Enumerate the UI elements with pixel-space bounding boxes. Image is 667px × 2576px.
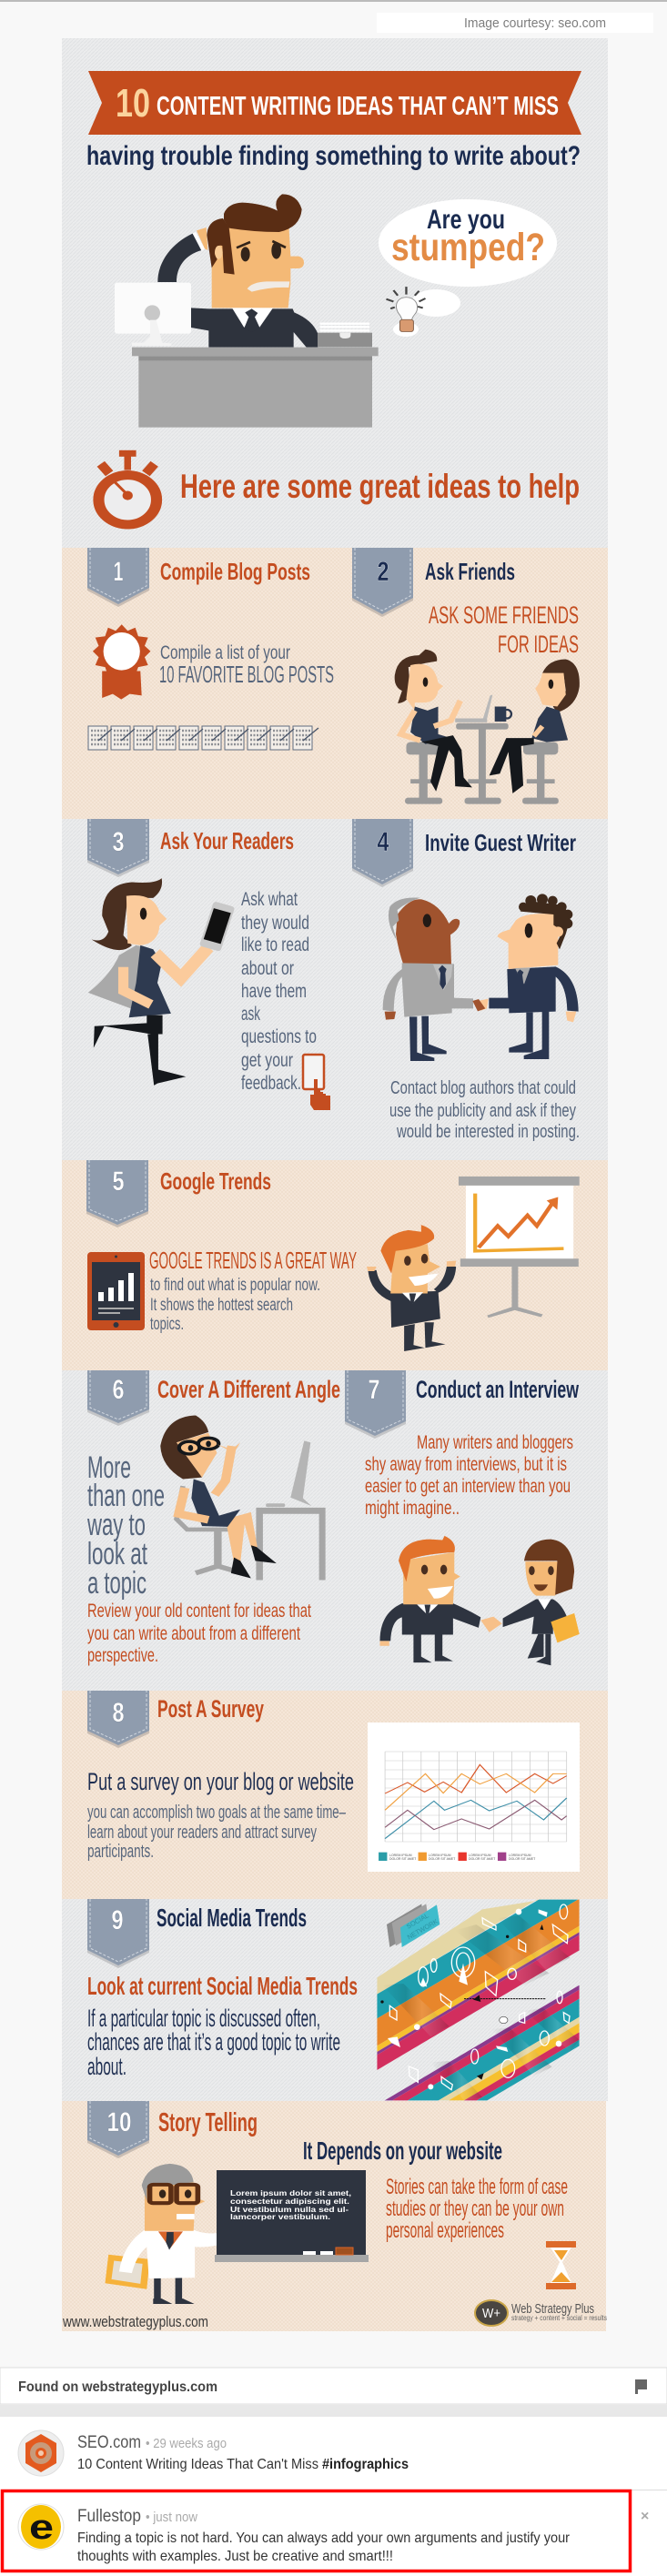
title ribbon (88, 71, 581, 135)
text: look at current trends (87, 1972, 358, 2080)
badge 4: 4 (377, 827, 389, 857)
text: look at current trends: chances are that it’s a good topic to write (87, 2028, 340, 2056)
text: look at current trends: If a particular topic is discussed often, (87, 2005, 320, 2032)
chart: survey line chart: LOREM IPSUM (509, 1854, 531, 1857)
text: look at current trends: Look at current Social Media Trends (87, 1972, 358, 2000)
text: put a survey on your blog: Put a survey on your blog or website (87, 1768, 354, 1795)
icon: flag (635, 2379, 647, 2394)
illustration: isometric social ribbons (377, 1900, 580, 2100)
text: ask what they would like: Ask what (241, 889, 298, 910)
badge 1: 1 (113, 557, 124, 587)
badge 1 (87, 548, 149, 607)
text: contact blog authors: use the publicity and ask if they (389, 1101, 576, 1121)
chalkboard with text: Ut vestibulum nulla sed ul- (230, 2205, 349, 2214)
badge 5 (86, 1160, 148, 1227)
text: google trends is a great way: It shows the hottest search (150, 1296, 293, 1315)
text: ask what they would like: about or (241, 958, 294, 979)
title ribbon: 10 (116, 81, 150, 126)
text: ask what they would like: like to read (241, 934, 309, 955)
logo: web strategy plus (475, 2300, 607, 2326)
text: google trends is a great way: topics. (150, 1315, 184, 1334)
speech bubble: are you stumped: stumped? (391, 226, 545, 269)
chalkboard with text: consectetur adipiscing elit. (230, 2197, 349, 2206)
badge 9 (87, 1899, 149, 1968)
text: ask what they would like (241, 889, 317, 1094)
badge 5: 5 (113, 1167, 124, 1197)
text: ask what they would like: they would (241, 913, 309, 934)
chart: presentation board with rising arrow (459, 1177, 580, 1318)
text: more than one way: than one (87, 1479, 165, 1513)
heading: cover a different angle: Cover A Different Angle (157, 1376, 340, 1403)
text: compile a list (159, 642, 334, 688)
text: more than one way: look at (87, 1537, 147, 1571)
icon: award ribbon (93, 624, 150, 700)
badge 3 (87, 819, 149, 877)
icon: tablet with bar chart (87, 1252, 145, 1330)
badge 4 (352, 819, 413, 887)
text: many writers and bloggers (365, 1432, 573, 1519)
chart: survey line chart (368, 1722, 580, 1872)
card: source (0, 2368, 667, 2404)
heading: ask friends: Ask Friends (425, 558, 515, 585)
panel: idea 8 post a survey (62, 1691, 608, 1899)
badge 2: 2 (377, 557, 389, 587)
comment: fullestop highlighted: Finding a topic is not hard. You can always add your own arguments and justify your (77, 2531, 571, 2546)
text: contact blog authors: Contact blog authors that could (390, 1078, 576, 1098)
heading: conduct an interview: Conduct an Interview (416, 1376, 580, 1403)
figure: woman holding phone (88, 878, 235, 1086)
figure: woman with glasses at desk (160, 1415, 326, 1580)
badge 2 (352, 548, 413, 617)
figure: excited man (367, 1225, 456, 1351)
text: google trends is a great way: GOOGLE TRENDS IS A GREAT WAY (149, 1247, 357, 1274)
subheading: it depends on your website: It Depends on your website (303, 2137, 502, 2165)
panel: ideas 6 and 7 (62, 1370, 608, 1691)
heading: story telling: Story Telling (158, 2108, 258, 2137)
figure: two women at a cafe table (395, 650, 580, 804)
text: contact blog authors (389, 1078, 580, 1142)
text: stories can take the form: personal experiences (386, 2218, 504, 2243)
badge 7: 7 (368, 1375, 380, 1405)
heading: invite guest writer: Invite Guest Writer (425, 829, 576, 856)
illustration: isometric social ribbons: NETWORK (406, 1917, 440, 1941)
logo: web strategy plus: W+ (482, 2306, 500, 2321)
icon: light bulb (386, 287, 426, 331)
chart: survey line chart: DOLOR SIT AMET (389, 1857, 417, 1861)
callout: ask some friends: FOR IDEAS (498, 631, 579, 658)
card: comments (0, 2417, 667, 2576)
image courtesy caption (377, 13, 653, 33)
text: compile a list: 10 FAVORITE BLOG POSTS (159, 661, 334, 688)
heading: compile blog posts: Compile Blog Posts (160, 558, 310, 585)
badge 8 (87, 1691, 149, 1748)
panel: hero intro (62, 38, 608, 548)
logo: web strategy plus: Web Strategy Plus (511, 2301, 594, 2317)
text: review your old content: you can write about from a different (87, 1623, 300, 1644)
figure: man and woman shaking hands (379, 1536, 580, 1665)
comment: seo.com: • 29 weeks ago (146, 2436, 227, 2451)
chart: survey line chart: DOLOR SIT AMET (469, 1857, 496, 1861)
image courtesy caption: Image courtesy: seo.com (464, 15, 606, 31)
badge 9: 9 (111, 1905, 124, 1935)
speech bubble: are you stumped: Are you (427, 205, 505, 235)
panel: ideas 3 and 4 (62, 819, 608, 1160)
badge 10: 10 (107, 2107, 131, 2137)
text: many writers and bloggers: might imagine.. (365, 1498, 460, 1519)
text: more than one way: More (87, 1450, 131, 1485)
figure: teacher (105, 2164, 245, 2304)
figure: two men shaking hands (383, 894, 579, 1061)
logo: web strategy plus: strategy + content + social = results (511, 2314, 607, 2322)
comment: fullestop highlighted: thoughts with examples. Just be creative and smart!!! (77, 2549, 393, 2564)
comment: fullestop highlighted: Fullestop (77, 2507, 141, 2526)
icon: phone and pointing hand (303, 1055, 330, 1110)
text: ask what they would like: questions to (241, 1026, 317, 1047)
heading: post a survey: Post A Survey (157, 1695, 264, 1722)
text: look at current trends: about. (87, 2053, 126, 2080)
text: google trends is a great way: to find out what is popular now. (150, 1276, 320, 1295)
chart: survey line chart: LOREM IPSUM (429, 1854, 451, 1857)
text: put a survey on your blog: participants. (87, 1842, 154, 1862)
text: compile a list: Compile a list of your (160, 642, 290, 663)
comment: seo.com: SEO.com (77, 2433, 141, 2452)
text: contact blog authors: would be interested in posting. (396, 1122, 580, 1142)
text: put a survey on your blog: learn about your readers and attract survey (87, 1823, 317, 1843)
icon row: ten checklists (88, 726, 318, 750)
text: stories can take the form (386, 2175, 568, 2243)
heading: social media trends: Social Media Trends (157, 1904, 307, 1932)
text: ask what they would like: have them (241, 981, 307, 1002)
text: many writers and bloggers: easier to get an interview than you (365, 1476, 571, 1497)
text: ask what they would like: ask (241, 1004, 260, 1025)
text: many writers and bloggers: Many writers and bloggers (417, 1432, 573, 1453)
comment: fullestop highlighted: e (29, 2509, 54, 2547)
panel: ideas 1 and 2 (62, 548, 608, 819)
callout: ask some friends: ASK SOME FRIENDS (429, 601, 579, 629)
callout: ask some friends (429, 601, 579, 658)
icon: stopwatch (97, 450, 158, 524)
text: google trends is a great way (149, 1247, 357, 1334)
speech bubble: are you stumped (379, 199, 557, 337)
badge 7 (345, 1370, 406, 1439)
comment: seo.com: 10 Content Writing Ideas That Can't Miss (77, 2457, 318, 2472)
text: ask what they would like: feedback. (241, 1073, 301, 1094)
panel: idea 9 social media trends (62, 1899, 608, 2101)
heading: ask your readers: Ask Your Readers (160, 827, 294, 854)
chalkboard with text: lamcorper vestibulum. (230, 2212, 330, 2221)
badge 6 (87, 1370, 149, 1426)
badge 3: 3 (113, 827, 124, 857)
chart: survey line chart: DOLOR SIT AMET (429, 1857, 456, 1861)
text: review your old content: Review your old content for ideas that (87, 1601, 311, 1621)
text: more than one way: a topic (87, 1566, 147, 1601)
text: put a survey on your blog (87, 1768, 354, 1862)
comment: fullestop highlighted: • just now (146, 2510, 197, 2525)
text: put a survey on your blog: you can accomplish two goals at the same time– (87, 1803, 347, 1823)
chalkboard with text: Lorem ipsum dolor sit amet, (230, 2188, 351, 2197)
chart: survey line chart: LOREM IPSUM (389, 1854, 412, 1857)
badge 8: 8 (113, 1698, 124, 1728)
comment: seo.com: #infographics (322, 2457, 409, 2472)
panel: idea 10 story telling (62, 2101, 607, 2331)
text: more than one way: way to (86, 1508, 146, 1542)
comment: fullestop highlighted (2, 2491, 630, 2571)
illustration: isometric social ribbons: SOCIAL (405, 1911, 430, 1931)
text: review your old content (87, 1601, 311, 1666)
panel: idea 5 google trends (62, 1160, 608, 1370)
comment: seo.com (18, 2430, 409, 2476)
chalkboard with text (215, 2170, 369, 2262)
badge 10 (87, 2101, 149, 2158)
chart: survey line chart: LOREM IPSUM (469, 1854, 491, 1857)
figure: stumped man at desk (115, 194, 379, 428)
heading: google trends: Google Trends (160, 1167, 271, 1195)
card: source: Found on webstrategyplus.com (18, 2379, 217, 2395)
text: ask what they would like: get your (241, 1050, 293, 1071)
text: review your old content: perspective. (87, 1645, 158, 1666)
close icon: × (641, 2509, 649, 2524)
icon: hourglass (546, 2241, 576, 2289)
text: more than one way (86, 1450, 165, 1601)
badge 6: 6 (113, 1375, 124, 1405)
website url: www.webstrategyplus.com (62, 2313, 208, 2330)
text: many writers and bloggers: shy away from interviews, but it is (365, 1454, 567, 1475)
chart: survey line chart: DOLOR SIT AMET (509, 1857, 536, 1861)
